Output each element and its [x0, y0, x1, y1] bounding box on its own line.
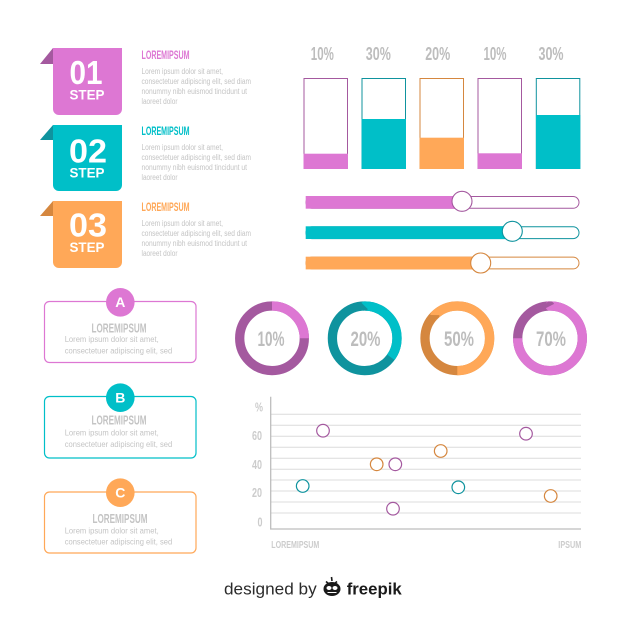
- step 02 text: nonummy nibh euismod tincidunt ut: [142, 163, 248, 172]
- step 03 text: [142, 219, 251, 258]
- donut 20%: 20%: [350, 328, 381, 351]
- y-axis labels: 20: [252, 486, 262, 500]
- bar 5 30%: 30%: [538, 44, 564, 64]
- step 03 ribbon card: [40, 201, 122, 268]
- box C text: consectetuer adipiscing elit, sed: [65, 537, 172, 547]
- slider pink: [306, 191, 579, 211]
- bar 4 10%: [478, 44, 522, 169]
- box A text: [65, 334, 172, 356]
- step 01 label: STEP: [70, 86, 104, 102]
- designed by text: designed by: [224, 580, 317, 598]
- bar 5 30%: [536, 44, 580, 169]
- step 03 text: laoreet dolor: [142, 249, 178, 258]
- bar 4 10%: 10%: [484, 44, 506, 64]
- panel: box B: [44, 383, 196, 458]
- step 03 heading: LOREMIPSUM: [142, 202, 190, 214]
- step 02 heading: LOREMIPSUM: [142, 126, 190, 138]
- panel: box C: [44, 478, 196, 553]
- freepik wordmark: freepik: [347, 580, 402, 598]
- badge C: [106, 478, 135, 507]
- x-axis label left: LOREMIPSUM: [271, 540, 319, 551]
- step 01 text: Lorem ipsum dolor sit amet,: [142, 67, 223, 76]
- box B text: Lorem ipsum dolor sit amet,: [65, 427, 159, 437]
- step 02 text: Lorem ipsum dolor sit amet,: [142, 143, 223, 152]
- step 01 ribbon card: [40, 48, 122, 115]
- box B heading: LOREMIPSUM: [92, 413, 146, 428]
- donut 70%: [518, 306, 582, 371]
- donut 10%: [240, 306, 304, 371]
- box C text: Lorem ipsum dolor sit amet,: [65, 526, 159, 536]
- step 03 number: 03: [69, 207, 107, 244]
- step 03 text: consectetuer adipiscing elit, sed diam: [142, 229, 251, 238]
- donut 10%: 10%: [258, 328, 285, 351]
- step 02 label: STEP: [70, 165, 104, 181]
- bar chart: [304, 44, 580, 169]
- box B outline: [44, 396, 196, 458]
- donut charts: [240, 293, 582, 384]
- step 02 ribbon card: [40, 125, 122, 191]
- box A text: consectetuer adipiscing elit, sed: [65, 346, 172, 356]
- step 02 text: consectetuer adipiscing elit, sed diam: [142, 153, 251, 162]
- footer credit: [224, 577, 402, 598]
- badge B: [106, 383, 135, 412]
- badge A: A: [115, 294, 125, 310]
- box A outline: [44, 302, 196, 362]
- box B text: [65, 427, 172, 449]
- step 01 number: 01: [70, 54, 102, 91]
- step 01 panel: [40, 48, 251, 115]
- bar 2 30%: 30%: [366, 44, 391, 64]
- data points: [296, 424, 557, 515]
- y-axis labels: %: [255, 400, 263, 414]
- x-axis label right: IPSUM: [558, 540, 581, 551]
- slider orange: [306, 253, 579, 273]
- step 03 text: Lorem ipsum dolor sit amet,: [142, 219, 223, 228]
- step 02 panel: [40, 125, 251, 191]
- y-axis labels: [252, 400, 263, 530]
- step 01 text: consectetuer adipiscing elit, sed diam: [142, 77, 251, 86]
- step 02 text: laoreet dolor: [142, 173, 178, 182]
- donut 70%: 70%: [536, 328, 566, 351]
- step 03 text: nonummy nibh euismod tincidunt ut: [142, 239, 248, 248]
- scatter chart: [252, 397, 581, 551]
- badge A: [106, 288, 135, 317]
- step 02 text: [142, 143, 251, 182]
- sliders: [306, 191, 579, 273]
- bar 2 30%: [362, 44, 406, 169]
- y-axis labels: 0: [258, 516, 263, 530]
- bar 1 10%: 10%: [311, 44, 334, 64]
- icon: freepik bee: [324, 577, 340, 596]
- bar 1 10%: [304, 44, 348, 169]
- step 01 heading: LOREMIPSUM: [142, 50, 190, 62]
- box A text: Lorem ipsum dolor sit amet,: [65, 334, 159, 344]
- step 01 text: nonummy nibh euismod tincidunt ut: [142, 87, 248, 96]
- donut 50%: 50%: [444, 328, 474, 351]
- donut 20%: [332, 306, 397, 371]
- box A heading: LOREMIPSUM: [92, 320, 146, 335]
- box C outline: [44, 492, 196, 553]
- box B text: consectetuer adipiscing elit, sed: [65, 439, 172, 449]
- slider teal: [306, 221, 579, 241]
- step 03 label: STEP: [70, 239, 104, 255]
- bar 3 20%: [420, 44, 464, 169]
- bar 3 20%: 20%: [425, 44, 450, 64]
- box C text: [65, 526, 172, 547]
- badge B: B: [115, 390, 125, 406]
- y-axis labels: 60: [252, 429, 262, 443]
- step 01 text: [142, 67, 251, 106]
- badge C: C: [115, 485, 125, 501]
- step 01 text: laoreet dolor: [142, 97, 178, 106]
- box C heading: LOREMIPSUM: [92, 511, 148, 526]
- panel: box A: [44, 288, 196, 362]
- donut 50%: [412, 293, 503, 384]
- step 02 number: 02: [69, 133, 107, 170]
- y-axis labels: 40: [252, 458, 262, 472]
- step 03 panel: [40, 201, 251, 268]
